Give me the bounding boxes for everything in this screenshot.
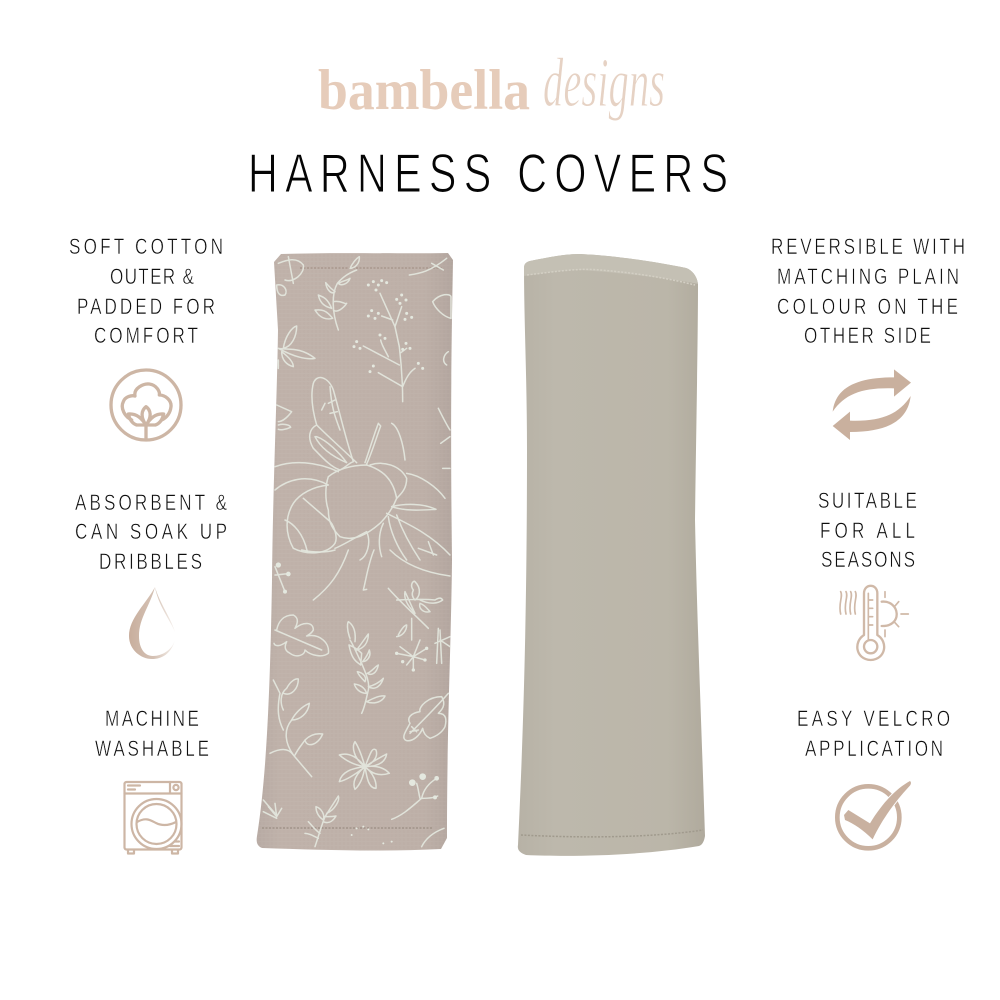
text block: easy velcro [797, 707, 950, 762]
icon: cotton boll [111, 370, 181, 440]
logo: bambella designs: bambella [318, 59, 530, 122]
stitching: bottom seam [521, 830, 703, 837]
text block: all seasons: SUITABLE [818, 489, 917, 514]
stitching: top seam [300, 267, 442, 269]
bee body [326, 465, 397, 538]
text block: absorbent: DRIBBLES [99, 550, 202, 575]
text block: absorbent: CAN SOAK UP [75, 520, 227, 545]
text block: reversible: OTHER SIDE [804, 324, 931, 349]
text block: soft cotton: SOFT COTTON [69, 235, 223, 260]
text block: reversible [771, 235, 965, 349]
text block: easy velcro: EASY VELCRO [797, 707, 950, 732]
text block: soft cotton [69, 235, 223, 349]
logo: bambella designs: designs [543, 45, 665, 122]
icon: check mark [837, 781, 911, 848]
stitching: top seam [527, 269, 695, 285]
floral print: upper half [275, 257, 451, 560]
floral print: lower half [263, 550, 450, 847]
icon: water drop [129, 587, 175, 659]
panel: plain reversible cover [518, 254, 705, 856]
top fold band [524, 254, 698, 284]
icon: thermometer and sun [840, 586, 908, 660]
text block: soft cotton: COMFORT [94, 324, 198, 349]
bee antennae [365, 423, 405, 464]
text block: machine washable: MACHINE [105, 707, 199, 732]
text block: soft cotton: PADDED FOR [77, 295, 215, 320]
text block: reversible: REVERSIBLE WITH [771, 235, 965, 260]
text block: absorbent: ABSORBENT & [75, 491, 227, 516]
text block: easy velcro: APPLICATION [805, 737, 943, 762]
title: HARNESS COVERS [248, 143, 728, 204]
bee wings [310, 378, 353, 470]
text block: machine washable [95, 707, 209, 762]
stitching: bottom seam [262, 827, 432, 829]
text block: all seasons: SEASONS [821, 548, 915, 573]
text block: machine washable: WASHABLE [95, 737, 209, 762]
text block: absorbent [75, 491, 227, 575]
panel: patterned harness cover [257, 253, 453, 851]
icon: reversible arrows [833, 369, 911, 440]
text block: soft cotton: OUTER & [110, 265, 194, 290]
text block: all seasons: FOR ALL [820, 519, 915, 544]
text block: reversible: COLOUR ON THE [777, 295, 958, 320]
text block: reversible: MATCHING PLAIN [777, 265, 959, 290]
logo: bambella designs [318, 45, 665, 122]
text block: all seasons [818, 489, 917, 573]
icon: washing machine [124, 782, 182, 854]
